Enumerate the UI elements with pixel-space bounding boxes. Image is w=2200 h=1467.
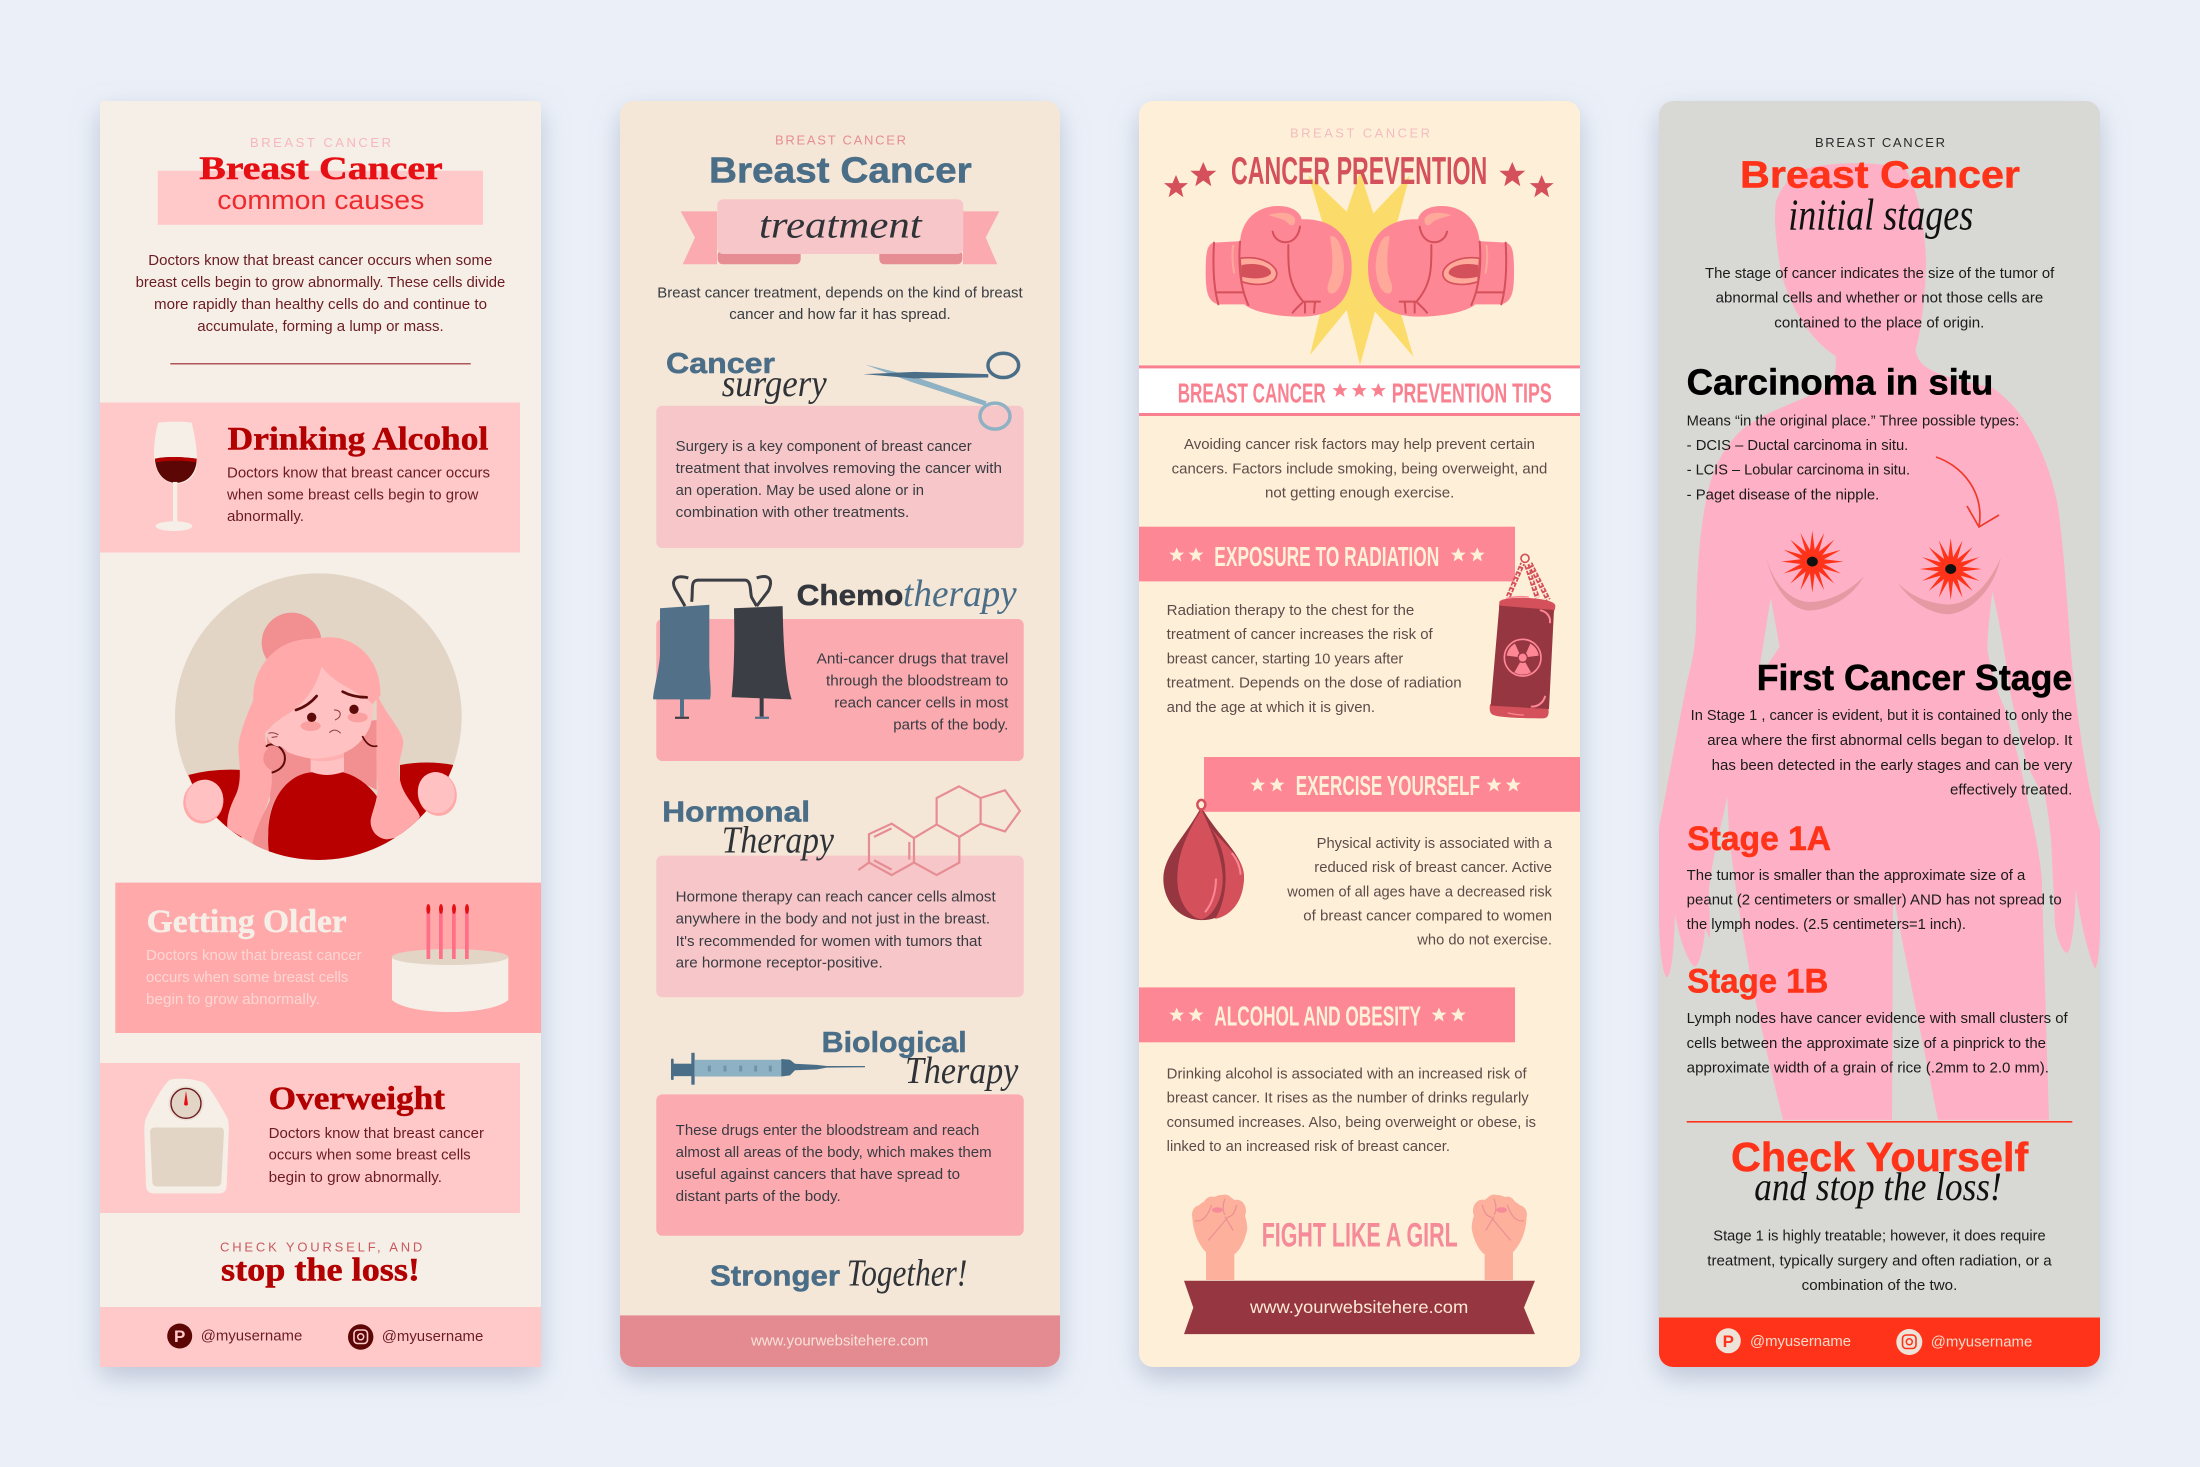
section: drinking alcohol: Drinking Alcohol xyxy=(228,421,488,457)
icon: hanging punching bag xyxy=(1490,554,1555,718)
intro text: The stage of cancer indicates the size of the tumor of xyxy=(1705,266,2055,282)
section: drinking alcohol: abnormally. xyxy=(227,509,304,525)
icon: scissors xyxy=(863,353,1019,429)
icon: pinterest: P xyxy=(174,1327,185,1346)
section: overweight xyxy=(100,1063,520,1213)
section: stage 1A xyxy=(1687,820,2062,933)
section: check yourself: Check Yourself xyxy=(1731,1134,2029,1180)
closing tagline: Together! xyxy=(847,1252,967,1294)
icon: wine glass xyxy=(154,422,197,531)
section: getting older: Doctors know that breast cancer xyxy=(146,948,362,964)
arrow: to breast xyxy=(1936,457,1999,527)
section: exercise yourself: who do not exercise. xyxy=(1416,933,1552,949)
section: overweight: begin to grow abnormally. xyxy=(269,1170,442,1186)
title block: Breast Cancer xyxy=(199,151,443,187)
section: stage 1B: Stage 1B xyxy=(1687,962,1828,1000)
section: alcohol and obesity: breast cancer. It rises as the number of drinks regularly xyxy=(1167,1090,1529,1106)
icon: right fist xyxy=(1472,1195,1527,1280)
section: hormonal therapy xyxy=(656,786,1024,997)
section: chemotherapy: reach cancer cells in most xyxy=(834,696,1008,712)
section: chemotherapy: Chemo xyxy=(797,580,903,612)
closing call to action: CHECK YOURSELF, AND xyxy=(220,1240,422,1254)
fight like a girl block: FIGHT LIKE A GIRL xyxy=(1262,1216,1458,1254)
panel: common causes xyxy=(100,101,541,1367)
footer: social handles xyxy=(100,1307,541,1367)
section: first cancer stage xyxy=(1691,657,2073,798)
footer: social handles: @myusername xyxy=(382,1328,483,1345)
section: exercise yourself: reduced risk of breast cancer. Active xyxy=(1314,860,1552,876)
section: drinking alcohol xyxy=(100,402,520,552)
section: carcinoma in situ: - LCIS – Lobular carcinoma in situ. xyxy=(1687,463,1910,479)
section: stage 1A: peanut (2 centimeters or smaller) AND has not spread to xyxy=(1687,893,2062,909)
intro text: Breast cancer treatment, depends on the kind of breast xyxy=(657,285,1023,301)
section: carcinoma in situ xyxy=(1687,362,2019,503)
ribbon: treatment: treatment xyxy=(759,204,923,246)
panel: initial stages xyxy=(1659,101,2100,1367)
section: check yourself xyxy=(1707,1134,2053,1294)
section: first cancer stage: effectively treated. xyxy=(1950,782,2072,798)
section: alcohol and obesity xyxy=(1139,987,1536,1155)
closing tagline: Stronger xyxy=(710,1260,840,1292)
section: drinking alcohol: Doctors know that breast cancer occurs xyxy=(227,466,490,482)
intro text: Avoiding cancer risk factors may help prevent certain xyxy=(1184,437,1535,453)
section: alcohol and obesity: linked to an increased risk of breast cancer. xyxy=(1167,1139,1450,1155)
footer: social handles: @myusername xyxy=(1931,1333,2032,1350)
banner: prevention tips: PREVENTION TIPS xyxy=(1392,377,1552,408)
icon: IV bags xyxy=(653,577,792,719)
section: first cancer stage: has been detected in the early stages and can be very xyxy=(1712,758,2073,774)
section: getting older xyxy=(115,883,541,1033)
section: stage 1B xyxy=(1687,962,2069,1076)
section: cancer surgery: surgery xyxy=(722,363,827,405)
section: biological therapy: Therapy xyxy=(905,1050,1018,1092)
section: exposure to radiation: treatment of cancer increases the risk of xyxy=(1167,627,1434,643)
section: hormonal therapy: It's recommended for women with tumors that xyxy=(676,934,982,950)
footer: social handles xyxy=(1659,1318,2100,1367)
intro text xyxy=(657,285,1023,323)
section: cancer surgery: treatment that involves removing the cancer with xyxy=(676,461,1002,477)
intro text: breast cells begin to grow abnormally. These cells divide xyxy=(136,275,505,291)
section: overweight: occurs when some breast cells xyxy=(269,1148,471,1164)
icon: starburst xyxy=(1308,172,1413,365)
section: check yourself: Stage 1 is highly treatable; however, it does require xyxy=(1713,1228,2046,1244)
illustration: body silhouette xyxy=(1659,163,2100,1120)
icon: right boxing glove xyxy=(1368,206,1514,317)
intro text xyxy=(1705,266,2055,332)
section: biological therapy: almost all areas of the body, which makes them xyxy=(676,1145,992,1161)
section: exercise yourself xyxy=(1163,757,1580,949)
section: biological therapy: These drugs enter the bloodstream and reach xyxy=(676,1123,979,1139)
section: getting older: occurs when some breast cells xyxy=(146,970,348,986)
section: exposure to radiation: and the age at which it is given. xyxy=(1167,700,1375,716)
section: biological therapy: Biological xyxy=(822,1027,967,1059)
ribbon: website xyxy=(1184,1281,1535,1334)
icon: weighing scale xyxy=(144,1079,229,1193)
section: first cancer stage: In Stage 1 , cancer is evident, but it is contained to only the xyxy=(1691,708,2072,724)
section: carcinoma in situ: Carcinoma in situ xyxy=(1687,362,1993,402)
section: chemotherapy: therapy xyxy=(903,573,1017,615)
icon: pinterest: P xyxy=(1723,1332,1734,1351)
title block xyxy=(1164,126,1554,197)
ribbon: website: www.yourwebsitehere.com xyxy=(1249,1297,1468,1317)
section: check yourself: and stop the loss! xyxy=(1754,1164,2002,1209)
section: alcohol and obesity: ALCOHOL AND OBESITY xyxy=(1214,1001,1421,1032)
section: alcohol and obesity: consumed increases. Also, being overweight or obese, is xyxy=(1167,1115,1536,1131)
intro text xyxy=(136,253,505,335)
section: exposure to radiation xyxy=(1139,527,1555,718)
section: getting older: Getting Older xyxy=(147,904,347,940)
section: carcinoma in situ: - Paget disease of the nipple. xyxy=(1687,487,1879,503)
section: stage 1B: approximate width of a grain of rice (.2mm to 2.0 mm). xyxy=(1687,1060,2049,1076)
banner: prevention tips xyxy=(1139,365,1580,416)
intro text: accumulate, forming a lump or mass. xyxy=(197,319,444,335)
title block: BREAST CANCER xyxy=(1815,135,1945,150)
section: exposure to radiation: breast cancer, starting 10 years after xyxy=(1167,651,1403,667)
illustration: worried woman in circle xyxy=(175,573,462,863)
icon: pinterest xyxy=(1716,1328,1741,1353)
section: cancer surgery: combination with other treatments. xyxy=(676,505,909,521)
title block xyxy=(709,133,972,190)
section: overweight: Doctors know that breast cancer xyxy=(269,1126,484,1142)
section: exposure to radiation: EXPOSURE TO RADIATION xyxy=(1214,541,1439,572)
closing call to action: stop the loss! xyxy=(221,1253,420,1289)
icon: speed bag xyxy=(1163,800,1244,920)
section: chemotherapy: parts of the body. xyxy=(893,718,1008,734)
section: exposure to radiation: Radiation therapy to the chest for the xyxy=(1167,603,1414,619)
intro text xyxy=(1172,437,1547,502)
section: stage 1A: the lymph nodes. (2.5 centimeters=1 inch). xyxy=(1687,917,1966,933)
fight like a girl block xyxy=(1184,1195,1535,1334)
section: check yourself: combination of the two. xyxy=(1802,1278,1957,1294)
section: biological therapy: distant parts of the body. xyxy=(676,1189,841,1205)
section: check yourself: treatment, typically surgery and often radiation, or a xyxy=(1707,1253,2053,1269)
intro text: cancer and how far it has spread. xyxy=(729,307,951,323)
title block: Breast Cancer xyxy=(709,149,972,190)
intro text: cancers. Factors include smoking, being overweight, and xyxy=(1172,461,1547,477)
icon: right tumor flower xyxy=(1920,538,1982,600)
icon: birthday cake xyxy=(392,904,508,1012)
title block: CANCER PREVENTION xyxy=(1231,150,1487,193)
banner: prevention tips: BREAST CANCER xyxy=(1178,377,1326,408)
section: first cancer stage: First Cancer Stage xyxy=(1757,657,2072,698)
title block xyxy=(1740,135,2020,240)
icon: hormone molecule xyxy=(858,786,1020,875)
intro text: not getting enough exercise. xyxy=(1265,486,1454,502)
title block: Breast Cancer xyxy=(1740,155,2020,197)
icon: left boxing glove xyxy=(1206,206,1352,317)
section: exercise yourself: EXERCISE YOURSELF xyxy=(1296,770,1480,801)
icon: right breast contour xyxy=(1897,558,2001,614)
section: getting older: begin to grow abnormally. xyxy=(146,992,320,1008)
section: alcohol and obesity: Drinking alcohol is associated with an increased risk of xyxy=(1167,1066,1528,1082)
section: hormonal therapy: Hormonal xyxy=(662,796,810,828)
footer: website: www.yourwebsitehere.com xyxy=(750,1333,928,1350)
section: hormonal therapy: Therapy xyxy=(722,820,834,862)
title block: initial stages xyxy=(1788,191,1973,240)
icon: left tumor flower xyxy=(1781,531,1843,593)
icon: left fist xyxy=(1192,1195,1247,1280)
section: chemotherapy: Anti-cancer drugs that travel xyxy=(817,651,1008,667)
title block xyxy=(158,135,483,225)
closing tagline xyxy=(710,1252,967,1294)
section: biological therapy: useful against cancers that have spread to xyxy=(676,1167,960,1183)
section: drinking alcohol: when some breast cells begin to grow xyxy=(226,487,479,503)
section: cancer surgery xyxy=(656,348,1024,548)
icon: pinterest xyxy=(167,1324,192,1348)
title block: BREAST CANCER xyxy=(1290,126,1430,141)
section: stage 1B: cells between the approximate size of a pinprick to the xyxy=(1687,1036,2046,1052)
footer: social handles: @myusername xyxy=(1750,1333,1851,1350)
title block: BREAST CANCER xyxy=(250,135,391,150)
footer: website xyxy=(620,1315,1060,1367)
icon: left breast contour xyxy=(1766,558,1864,611)
icon: instagram xyxy=(348,1324,373,1350)
intro text: Doctors know that breast cancer occurs when some xyxy=(148,253,492,269)
section: cancer surgery: an operation. May be used alone or in xyxy=(676,483,924,499)
footer: social handles: @myusername xyxy=(201,1328,302,1345)
section: cancer surgery: Surgery is a key component of breast cancer xyxy=(676,439,972,455)
section: hormonal therapy: Hormone therapy can reach cancer cells almost xyxy=(676,890,996,906)
section: hormonal therapy: anywhere in the body and not just in the breast. xyxy=(676,912,990,928)
section: cancer surgery: Cancer xyxy=(666,348,775,380)
section: hormonal therapy: are hormone receptor-positive. xyxy=(676,956,883,972)
section: exercise yourself: of breast cancer compared to women xyxy=(1303,908,1552,924)
section: stage 1A: Stage 1A xyxy=(1687,820,1831,858)
title block: common causes xyxy=(217,185,424,215)
panel: treatment xyxy=(620,101,1060,1367)
panel: prevention xyxy=(1139,101,1580,1367)
intro text: more rapidly than healthy cells do and continue to xyxy=(154,297,487,313)
section: biological therapy xyxy=(656,1027,1024,1236)
section: stage 1A: The tumor is smaller than the approximate size of a xyxy=(1687,868,2026,884)
section: chemotherapy: through the bloodstream to xyxy=(826,674,1008,690)
intro text: abnormal cells and whether or not those cells are xyxy=(1716,290,2043,306)
section: first cancer stage: area where the first abnormal cells began to develop. It xyxy=(1707,733,2072,749)
closing call to action xyxy=(220,1240,422,1289)
intro text: contained to the place of origin. xyxy=(1774,316,1984,332)
section: exercise yourself: Physical activity is associated with a xyxy=(1317,836,1553,852)
icon: instagram xyxy=(1896,1329,1922,1355)
section: carcinoma in situ: - DCIS – Ductal carcinoma in situ. xyxy=(1687,438,1908,454)
title block: BREAST CANCER xyxy=(775,133,906,148)
section: chemotherapy xyxy=(653,573,1024,761)
section: overweight: Overweight xyxy=(269,1081,445,1117)
section: carcinoma in situ: Means “in the original place.” Three possible types: xyxy=(1687,413,2019,429)
icon: syringe xyxy=(671,1053,865,1085)
section: stage 1B: Lymph nodes have cancer evidence with small clusters of xyxy=(1687,1011,2069,1027)
section: exercise yourself: women of all ages have a decreased risk xyxy=(1286,884,1553,900)
section: exposure to radiation: treatment. Depends on the dose of radiation xyxy=(1167,676,1462,692)
ribbon: treatment xyxy=(681,199,999,264)
